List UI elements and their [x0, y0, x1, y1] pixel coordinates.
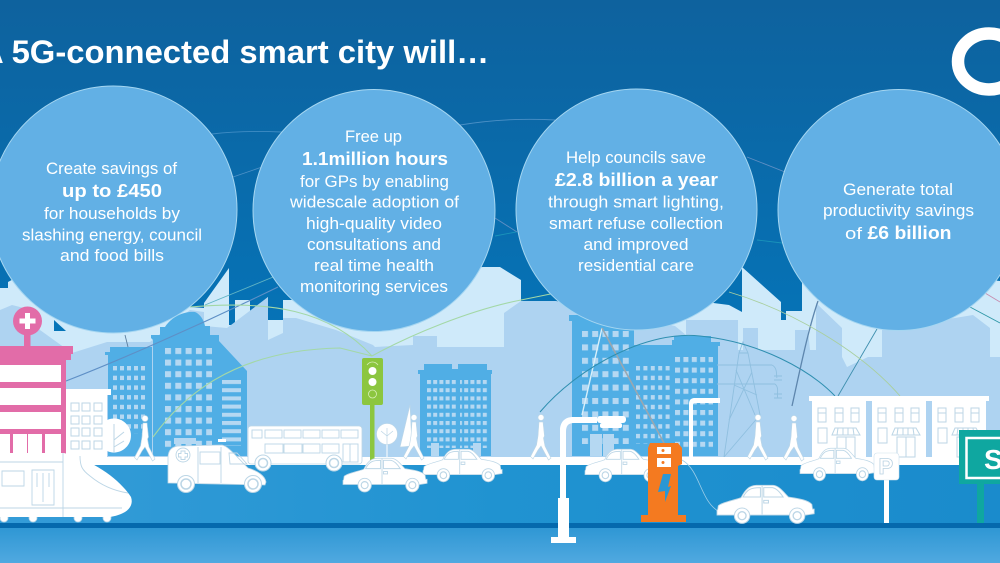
car: far centre	[423, 449, 502, 482]
circle: council savings: and improved	[584, 236, 688, 254]
car: foreground charging	[717, 485, 814, 523]
street lamp large	[551, 416, 626, 543]
circle: council savings: through smart lighting,	[548, 194, 724, 212]
circle: council savings	[516, 89, 757, 330]
pylon	[717, 342, 782, 457]
building: centre block	[418, 364, 492, 456]
car: by parking sign	[800, 448, 876, 481]
building: far right tower	[634, 336, 720, 456]
circle: council savings: £2.8 billion a year	[555, 170, 718, 190]
tree left	[107, 418, 131, 453]
pavement	[60, 457, 1000, 465]
circle: productivity savings: of	[845, 225, 863, 243]
circle: productivity savings: £6 billion	[868, 223, 952, 243]
circle: GP hours: high-quality video	[306, 215, 442, 233]
circle: council savings: Help councils save	[566, 149, 706, 167]
train	[0, 453, 132, 522]
background sky	[0, 0, 1000, 345]
circle: GP hours	[253, 90, 495, 332]
parking sign: P	[878, 454, 893, 479]
circle: council savings: smart refuse collection	[549, 215, 723, 233]
car: near centre	[343, 458, 427, 492]
skyline: pale far layer	[0, 267, 1000, 420]
small street lamp	[689, 398, 720, 457]
shops row	[809, 396, 989, 457]
circle: GP hours: real time health	[314, 257, 434, 275]
road edge stripe	[0, 523, 1000, 528]
small white building	[66, 389, 111, 457]
circle: productivity savings: Generate total	[843, 181, 953, 199]
circle: GP hours: monitoring services	[300, 278, 448, 296]
logo: O2 partial	[958, 34, 1000, 90]
skyline: mid layer	[0, 297, 1000, 460]
skyline: dark fragment	[54, 320, 66, 331]
hospital	[0, 306, 73, 454]
circle: household savings: for households by	[44, 205, 181, 223]
car: right of streetlight	[585, 449, 664, 482]
circle: household savings: slashing energy, council	[22, 226, 202, 244]
bus	[248, 426, 362, 471]
circle: council savings: residential care	[578, 257, 694, 275]
S road sign	[959, 430, 1000, 523]
charging point	[641, 443, 686, 522]
circle: GP hours: consultations and	[307, 236, 441, 254]
circle: household savings: and food bills	[60, 247, 164, 265]
traffic light	[362, 358, 383, 461]
building: left tower	[105, 347, 152, 456]
circle: productivity savings	[778, 90, 1000, 330]
foreground ground band	[0, 528, 1000, 563]
parking sign	[874, 453, 899, 523]
building: tall tower	[151, 312, 247, 456]
tree centre	[376, 424, 398, 457]
circle: GP hours: for GPs by enabling	[300, 173, 449, 191]
circle: household savings	[0, 86, 237, 333]
pedestrian 1	[134, 416, 155, 461]
pedestrian 2 with flag	[400, 405, 424, 460]
pedestrian 4	[748, 414, 768, 460]
circle: GP hours: widescale adoption of	[289, 194, 459, 212]
circle: GP hours: Free up	[345, 128, 402, 146]
charging cable	[682, 460, 718, 511]
circle: household savings: Create savings of	[46, 160, 177, 178]
pedestrian 5	[784, 416, 804, 461]
circle: household savings: up to £450	[62, 181, 162, 201]
ambulance	[168, 439, 266, 492]
road	[0, 465, 1000, 523]
circle: GP hours: 1.1million hours	[302, 149, 448, 169]
circle: productivity savings: productivity savings	[823, 202, 974, 220]
connection lines	[66, 119, 1000, 443]
building: right tower	[569, 315, 634, 456]
pedestrian 3	[530, 414, 551, 460]
